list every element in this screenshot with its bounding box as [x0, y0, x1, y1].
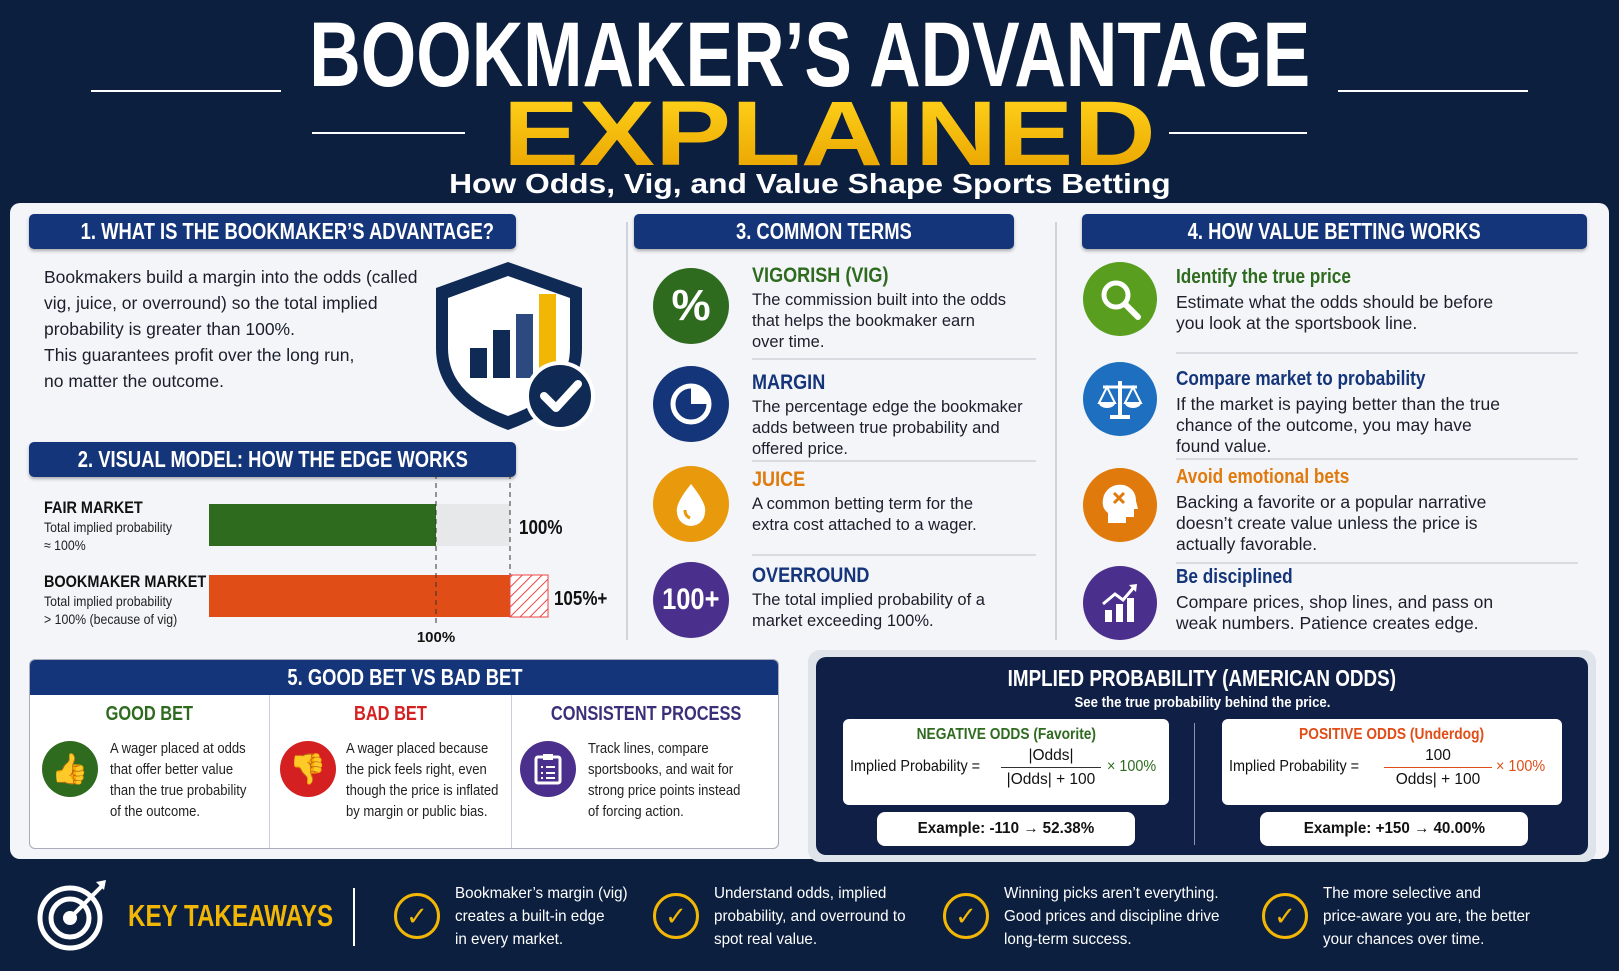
term: juice — [653, 466, 977, 542]
item: disciplined: weak numbers. Patience creates edge. — [1176, 613, 1479, 633]
negative odds box — [843, 719, 1169, 805]
section 5: good bet vs bad bet — [29, 659, 779, 849]
item: compare: chance of the outcome, you may have — [1176, 415, 1472, 435]
icon: thumbs up — [42, 741, 98, 797]
term: margin: adds between true probability and — [752, 419, 1000, 437]
bookmaker market label: > 100% (because of vig) — [44, 611, 177, 627]
key takeaways bar: probability, and overround to — [714, 908, 906, 925]
column: good bet: than the true probability — [110, 783, 246, 799]
positive odds box: POSITIVE ODDS (Underdog) — [1299, 726, 1485, 743]
bookmaker market label — [44, 572, 206, 627]
item: avoid: Backing a favorite or a popular narrative — [1176, 492, 1486, 512]
item: disciplined: Compare prices, shop lines, and pass on — [1176, 592, 1493, 612]
icon: drop — [653, 466, 729, 542]
section 4: value betting — [1080, 214, 1589, 640]
item: avoid: doesn’t create value unless the price is — [1176, 513, 1478, 533]
term: overround: OVERROUND — [752, 564, 869, 587]
key takeaways bar: spot real value. — [714, 931, 817, 948]
term: margin: MARGIN — [752, 371, 825, 394]
section 1 — [27, 214, 518, 391]
term: margin: The percentage edge the bookmaker — [752, 398, 1023, 416]
column: consistent process: CONSISTENT PROCESS — [551, 703, 741, 725]
column: bad bet: by margin or public bias. — [346, 804, 487, 820]
heading: implied probability: IMPLIED PROBABILITY (AMERICAN ODDS) — [1008, 665, 1396, 691]
icon: scale — [1083, 362, 1157, 436]
item: disciplined — [1083, 566, 1493, 640]
icon: percent — [653, 268, 729, 344]
positive odds box: Implied Probability = — [1229, 758, 1359, 775]
icon: thumbs down — [280, 741, 336, 797]
column: consistent process: of forcing action. — [588, 804, 684, 820]
item: identify: Estimate what the odds should be before — [1176, 292, 1493, 312]
bar chart: 100% — [519, 516, 562, 538]
term: juice: extra cost attached to a wager. — [752, 516, 977, 534]
icon: target — [38, 880, 106, 950]
column: consistent process: strong price points instead — [588, 783, 740, 799]
icon: 100+ — [653, 562, 729, 638]
item: identify — [1083, 262, 1493, 336]
item: disciplined: Be disciplined — [1176, 566, 1293, 588]
column: bad bet: though the price is inflated — [346, 783, 498, 799]
takeaway 1: ✓ — [406, 901, 428, 931]
negative odds box: Implied Probability = — [850, 758, 980, 775]
fair market label — [44, 498, 172, 553]
icon: shield — [436, 262, 595, 431]
item: compare: found value. — [1176, 436, 1271, 456]
icon: 100+: 100+ — [662, 583, 720, 616]
takeaway 4 — [1262, 893, 1308, 939]
key takeaways bar: The more selective and — [1323, 885, 1481, 902]
explained line left — [312, 132, 465, 134]
icon: clipboard — [520, 741, 576, 797]
takeaway 1 — [394, 893, 440, 939]
column: bad bet: the pick feels right, even — [346, 762, 487, 778]
heading 2 — [29, 442, 516, 477]
heading 5: 5. GOOD BET VS BAD BET — [287, 664, 523, 690]
bookmaker market label: BOOKMAKER MARKET — [44, 572, 206, 591]
example negative — [877, 812, 1135, 846]
takeaway 2 — [653, 893, 699, 939]
text block 1: probability is greater than 100%. — [44, 319, 295, 339]
column: bad bet: BAD BET — [354, 703, 427, 725]
icon: percent: % — [671, 281, 711, 330]
item: compare — [1083, 362, 1500, 456]
item: avoid: actually favorable. — [1176, 534, 1317, 554]
column: good bet: of the outcome. — [110, 804, 200, 820]
section 3: common terms — [632, 214, 1036, 638]
column: good bet: A wager placed at odds — [110, 741, 246, 757]
column: consistent process — [520, 703, 741, 820]
term: margin — [653, 366, 1023, 458]
heading 4 — [1082, 214, 1587, 249]
icon: growth chart — [1083, 566, 1157, 640]
column: bad bet: A wager placed because — [346, 741, 488, 757]
section 2 — [27, 442, 608, 642]
item: compare: If the market is paying better than the true — [1176, 394, 1500, 414]
text block 1: Bookmakers build a margin into the odds (called — [44, 267, 418, 287]
item: avoid — [1083, 466, 1486, 554]
term: vig: that helps the bookmaker earn — [752, 312, 975, 330]
key takeaways bar: Understand odds, implied — [714, 885, 886, 902]
positive odds box: Odds| + 100 — [1396, 771, 1480, 788]
heading: key takeaways: KEY TAKEAWAYS — [128, 898, 333, 933]
column: good bet: GOOD BET — [106, 703, 193, 725]
fair market label: ≈ 100% — [44, 537, 86, 553]
icon: thumbs down: 👎 — [289, 752, 327, 786]
negative odds box: |Odds| + 100 — [1007, 771, 1095, 788]
takeaway 2: ✓ — [665, 901, 687, 931]
text block 1: no matter the outcome. — [44, 371, 224, 391]
key takeaways bar — [38, 880, 1530, 950]
icon: thumbs up: 👍 — [51, 752, 89, 786]
term: overround: The total implied probability of a — [752, 591, 985, 609]
bar chart: 105%+ — [554, 587, 608, 609]
example negative: Example: -110 → 52.38% — [918, 820, 1094, 837]
panel: implied probability: See the true probability behind the price. — [1074, 694, 1330, 711]
term: juice: JUICE — [752, 468, 805, 491]
key takeaways bar: Winning picks aren’t everything. — [1004, 885, 1219, 902]
heading 2: 2. VISUAL MODEL: HOW THE EDGE WORKS — [78, 446, 468, 472]
text block 1: This guarantees profit over the long run, — [44, 345, 354, 365]
example positive — [1260, 812, 1528, 846]
subtitle explained: EXPLAINED — [503, 83, 1155, 185]
term: vig: The commission built into the odds — [752, 291, 1006, 309]
positive odds box: 100 — [1425, 747, 1451, 764]
takeaway 4: ✓ — [1274, 901, 1296, 931]
item: identify: Identify the true price — [1176, 266, 1351, 288]
heading 3: 3. COMMON TERMS — [736, 218, 912, 244]
takeaway 3: ✓ — [955, 901, 977, 931]
item: compare: Compare market to probability — [1176, 368, 1425, 390]
fair market label: Total implied probability — [44, 519, 172, 535]
term: juice: A common betting term for the — [752, 495, 973, 513]
takeaway 3 — [943, 893, 989, 939]
fair market label: FAIR MARKET — [44, 498, 143, 517]
item: identify: you look at the sportsbook line. — [1176, 313, 1417, 333]
column: good bet — [42, 703, 246, 820]
term: vig — [653, 264, 1006, 351]
column: consistent process: sportsbooks, and wait for — [588, 762, 733, 778]
key takeaways bar: creates a built-in edge — [455, 908, 605, 925]
example positive: Example: +150 → 40.00% — [1303, 820, 1485, 837]
text block 1 — [44, 267, 418, 391]
text block 1: vig, juice, or overround) so the total implied — [44, 293, 378, 313]
key takeaways bar: your chances over time. — [1323, 931, 1484, 948]
bookmaker market label: Total implied probability — [44, 593, 172, 609]
column: bad bet — [280, 703, 498, 820]
panel: implied probability — [808, 650, 1596, 862]
main white panel — [10, 203, 1609, 859]
positive odds box — [1222, 719, 1562, 805]
heading 5 — [30, 660, 780, 695]
column: good bet: that offer better value — [110, 762, 233, 778]
negative odds box: |Odds| — [1028, 747, 1074, 764]
title line right — [1338, 90, 1528, 92]
key takeaways bar: price-aware you are, the better — [1323, 908, 1530, 925]
heading 1: 1. WHAT IS THE BOOKMAKER’S ADVANTAGE? — [81, 218, 494, 244]
icon: magnifier — [1083, 262, 1157, 336]
term: margin: offered price. — [752, 440, 848, 458]
term: overround: market exceeding 100%. — [752, 612, 934, 630]
title line left — [91, 90, 281, 92]
negative odds box: × 100% — [1107, 758, 1156, 775]
negative odds box: NEGATIVE ODDS (Favorite) — [916, 726, 1096, 743]
title: BOOKMAKER’S ADVANTAGE — [310, 4, 1310, 106]
positive odds box: × 100% — [1496, 758, 1545, 775]
icon: head x — [1083, 468, 1157, 542]
explained line right — [1169, 132, 1307, 134]
key takeaways bar: in every market. — [455, 931, 563, 948]
key takeaways bar: Bookmaker’s margin (vig) — [455, 885, 628, 902]
term: overround — [653, 562, 985, 638]
term: vig: VIGORISH (VIG) — [752, 264, 888, 287]
column: consistent process: Track lines, compare — [588, 741, 709, 757]
heading 3 — [634, 214, 1014, 249]
heading 4: 4. HOW VALUE BETTING WORKS — [1188, 218, 1481, 244]
icon: pie — [653, 366, 729, 442]
heading 1 — [29, 214, 516, 249]
tagline: How Odds, Vig, and Value Shape Sports Betting — [449, 168, 1171, 199]
term: vig: over time. — [752, 333, 824, 351]
key takeaways bar: Good prices and discipline drive — [1004, 908, 1219, 925]
item: avoid: Avoid emotional bets — [1176, 466, 1349, 488]
key takeaways bar: long-term success. — [1004, 931, 1132, 948]
bar chart — [209, 474, 608, 642]
